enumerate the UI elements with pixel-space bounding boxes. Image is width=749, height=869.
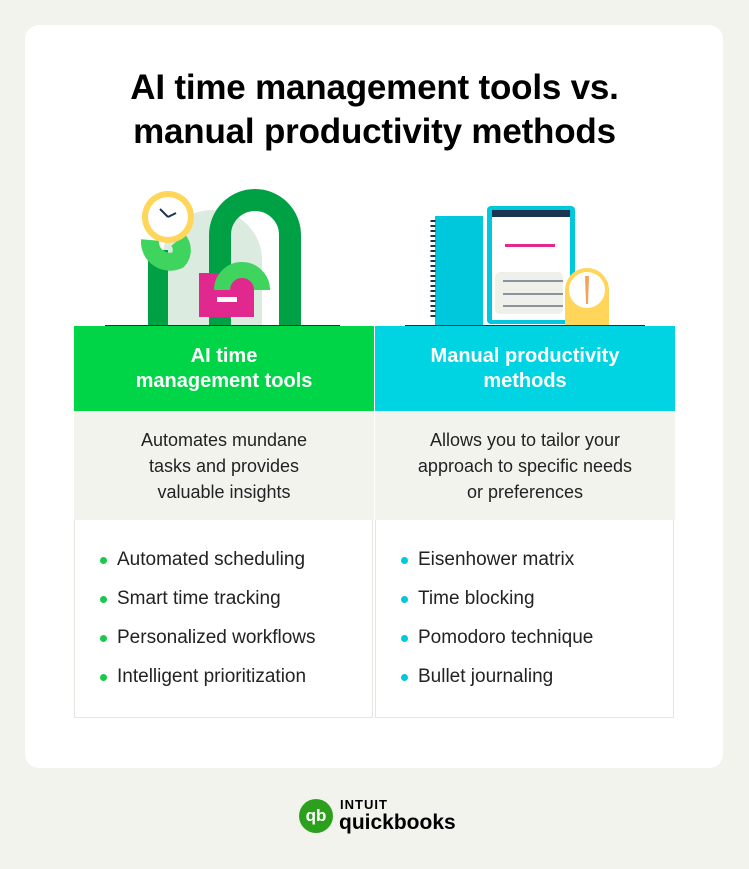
description: manual: Allows you to tailor your bbox=[430, 430, 620, 450]
list: manual bbox=[375, 520, 674, 718]
illustration: manual methods bbox=[405, 206, 645, 326]
logo: INTUIT bbox=[340, 797, 388, 812]
description: AI tools: Automates mundane bbox=[141, 430, 307, 450]
list: manual: Pomodoro technique bbox=[418, 627, 593, 648]
header: manual methods bbox=[375, 326, 675, 411]
list: manual: Time blocking bbox=[418, 588, 535, 609]
header: AI tools: AI time bbox=[191, 344, 257, 366]
list: AI tools: Automated scheduling bbox=[117, 549, 305, 570]
list: AI tools: Intelligent prioritization bbox=[117, 666, 306, 687]
title: manual productivity methods bbox=[133, 112, 616, 151]
header: manual methods: Manual productivity bbox=[431, 344, 619, 366]
list: AI tools bbox=[74, 520, 373, 718]
header: manual methods: methods bbox=[483, 370, 567, 392]
list: AI tools: Smart time tracking bbox=[117, 588, 281, 609]
logo bbox=[299, 797, 456, 834]
header: AI tools: management tools bbox=[136, 370, 312, 392]
description: manual: or preferences bbox=[467, 482, 583, 502]
title: AI time management tools vs. bbox=[130, 68, 619, 107]
description: manual: approach to specific needs bbox=[418, 456, 632, 476]
description: AI tools: tasks and provides bbox=[149, 456, 299, 476]
description: AI tools bbox=[74, 411, 374, 520]
title bbox=[130, 68, 619, 151]
list: manual: Eisenhower matrix bbox=[418, 549, 574, 570]
header: AI tools bbox=[74, 326, 374, 411]
description: manual bbox=[375, 411, 675, 520]
list: AI tools: Personalized workflows bbox=[117, 627, 316, 648]
illustration: AI tools bbox=[105, 189, 340, 326]
logo: qb bbox=[306, 806, 326, 825]
logo: quickbooks bbox=[339, 811, 456, 834]
description: AI tools: valuable insights bbox=[157, 482, 291, 502]
list: manual: Bullet journaling bbox=[418, 666, 553, 687]
card bbox=[25, 25, 723, 768]
